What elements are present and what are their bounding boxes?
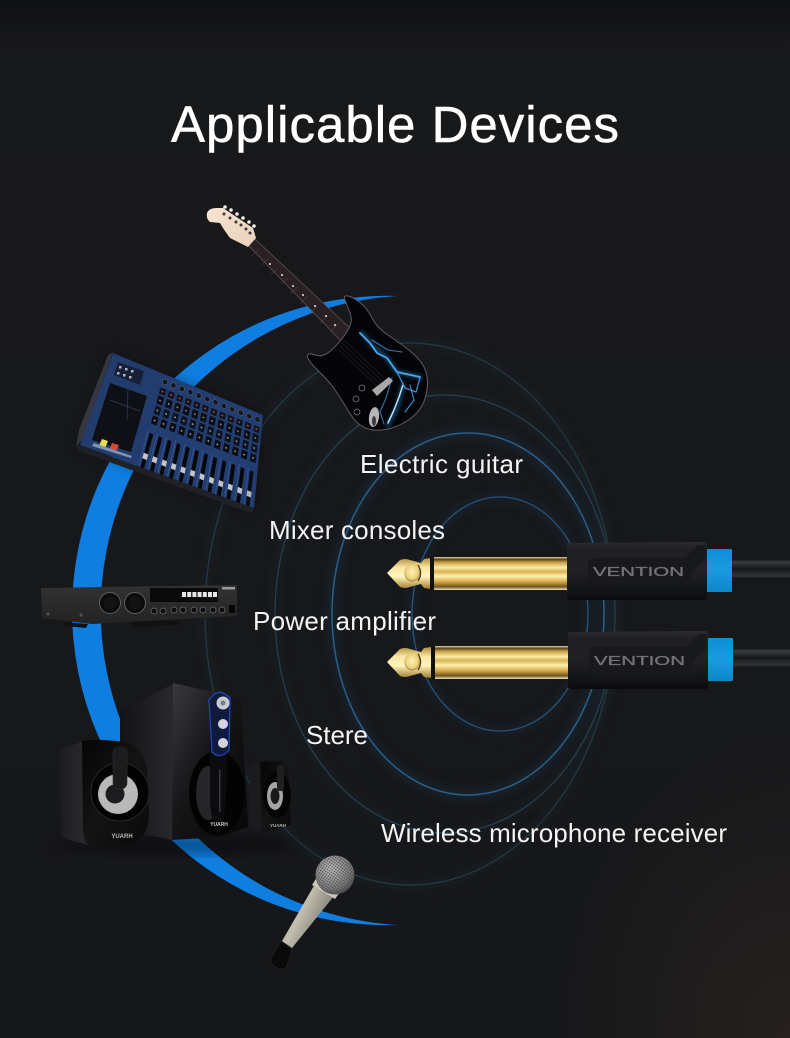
cable plug: top — [387, 542, 790, 600]
subwoofer control strip — [210, 693, 228, 834]
left satellite speaker — [58, 740, 149, 847]
brand text: VENTION — [594, 654, 685, 668]
cable — [732, 649, 790, 667]
label: stereo: Stere — [306, 720, 368, 750]
speakers shadow — [55, 836, 295, 854]
black barrel — [568, 631, 708, 689]
subwoofer driver — [189, 751, 245, 835]
icon: stereo speakers — [55, 683, 295, 854]
microphone body — [282, 884, 334, 948]
sound wave rings — [205, 343, 615, 885]
label: mixer consoles: Mixer consoles — [269, 515, 445, 545]
mixer master section — [92, 383, 147, 452]
black barrel — [567, 542, 707, 600]
amplifier display — [150, 588, 218, 602]
amplifier knobs — [100, 592, 146, 614]
left satellite speaker: YUARH — [111, 834, 133, 840]
amplifier jacks — [151, 607, 225, 614]
mixer side — [76, 352, 113, 447]
mixer top panel — [80, 353, 263, 508]
right satellite speaker — [250, 761, 291, 833]
microphone handle end — [270, 941, 292, 969]
guitar body — [307, 296, 428, 430]
right satellite speaker: YUARH — [270, 823, 286, 828]
cable plug: bottom — [387, 631, 790, 689]
icon: stereo speakers: YUARH — [210, 822, 228, 828]
label: wireless microphone receiver: Wireless microphone receiver — [381, 818, 727, 848]
guitar bridge — [372, 377, 393, 396]
icon: mixer console — [76, 352, 263, 513]
amplifier body — [41, 585, 237, 624]
label: electric guitar: Electric guitar — [360, 449, 523, 479]
mixer front lip — [77, 445, 254, 513]
gold shaft — [433, 557, 567, 590]
gold shaft — [434, 646, 568, 679]
label: power amplifier: Power amplifier — [253, 606, 436, 636]
mixer channels — [138, 374, 262, 510]
guitar neck — [248, 239, 352, 341]
blue ring — [707, 638, 733, 681]
icon: microphone — [270, 856, 354, 969]
blue ring — [706, 549, 732, 592]
mixer buttons — [99, 439, 108, 448]
subwoofer side — [120, 684, 173, 840]
microphone head — [316, 856, 354, 894]
gold tip — [387, 647, 431, 678]
guitar lightning — [360, 333, 420, 425]
cable — [730, 560, 790, 578]
mixer shadow — [78, 353, 263, 512]
subwoofer front — [172, 683, 248, 840]
icon: power amplifier — [41, 585, 237, 628]
guitar knob plate — [368, 406, 380, 428]
icon: electric guitar — [207, 205, 428, 430]
brand text: VENTION — [593, 565, 684, 579]
subwoofer knobs — [209, 692, 230, 756]
gold tip — [387, 558, 430, 589]
title: Applicable Devices — [171, 96, 619, 153]
guitar headstock — [207, 208, 256, 247]
blue crescent arc — [72, 296, 398, 925]
